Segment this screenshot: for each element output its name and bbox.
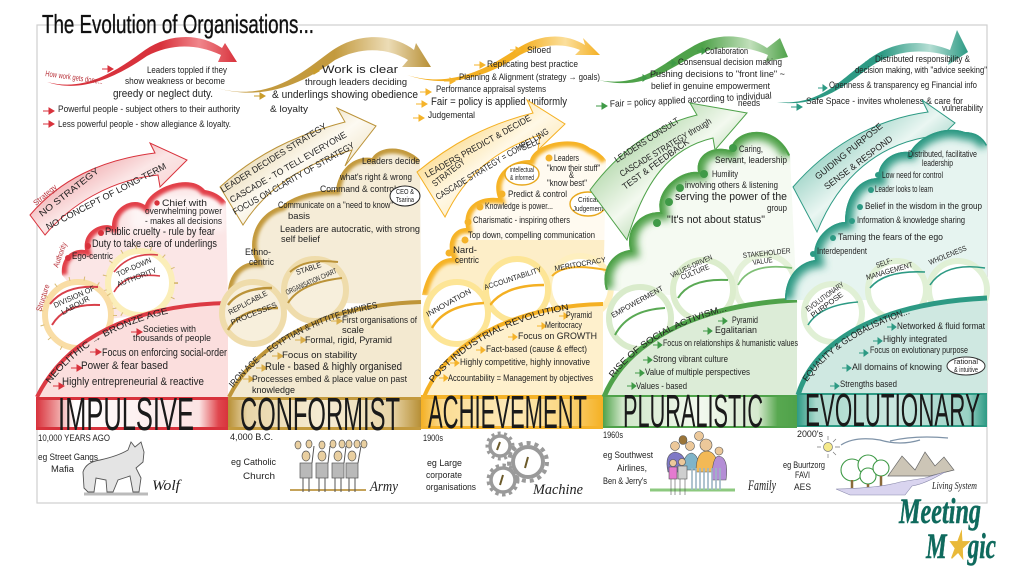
cloud: authority: Caring,: [739, 144, 763, 155]
caption: impulsive: [38, 433, 182, 494]
circle: stable organisation chart: [284, 259, 346, 321]
how work gets done text: Collaboration: [705, 46, 748, 57]
cloud: authority: [51, 175, 230, 320]
arch: era: Societies with: [143, 324, 196, 335]
caption: evolutionary: AES: [794, 482, 811, 493]
cloud: authority: self belief: [281, 234, 320, 245]
cloud: authority: Ego-centric: [72, 251, 113, 262]
arch: era: Processes embed & place value on past: [252, 374, 407, 385]
callout: rational and intuitive: & intuitive: [954, 365, 978, 374]
banner: conformist: CONFORMIST: [240, 388, 400, 440]
banner: conformist: [228, 388, 421, 440]
cloud: authority: "know best": [547, 178, 587, 189]
cloud: authority: [785, 125, 989, 305]
how work gets done text: [596, 46, 785, 110]
caption: pluralistic: 1960s: [603, 430, 623, 441]
how work gets done text: [413, 45, 600, 121]
circle: stable organisation chart: STABLE: [295, 260, 322, 277]
strategy arrow: [793, 100, 955, 232]
banner: impulsive: IMPULSIVE: [58, 388, 194, 440]
caption: conformist: [230, 432, 398, 495]
how work gets done text: show weakness or become: [125, 76, 225, 87]
arch: era: Pyramid: [566, 310, 592, 321]
cloud: authority: Top down, compelling communication: [468, 230, 595, 241]
strategy text: SENSE & RESPOND: [822, 133, 895, 192]
how work gets done text: Consensual decision making: [678, 57, 782, 68]
arch: era: First organisations of: [342, 315, 417, 326]
cloud: authority: Predict & control: [508, 189, 567, 200]
strategy text: NO CONCEPT OF LONG-TERM: [44, 161, 168, 232]
logo: meeting magic: M★gic: [925, 526, 996, 566]
circle: stakeholder value: [735, 246, 795, 315]
arch: era: POST INDUSTRIAL REVOLUTION: [428, 304, 568, 382]
circle: top-down authority: TOP-DOWN: [115, 256, 153, 279]
how work gets done arrow: [407, 37, 600, 81]
strategy arrow: [417, 100, 565, 217]
caption: evolutionary: Living System: [931, 480, 977, 492]
banner: impulsive: [36, 388, 228, 440]
arch: era: [602, 298, 798, 397]
caption: achievement: eg Large: [427, 458, 462, 469]
circle: wholeness: WHOLENESS: [927, 244, 968, 267]
arch: era: Values - based: [636, 381, 687, 392]
banner: pluralistic: [603, 385, 797, 437]
circle: replicable processes: PROCESSES: [229, 300, 278, 327]
strategy text: CASCADE STRATEGY through: [618, 116, 713, 179]
cloud: authority: Leader looks to learn: [875, 184, 933, 195]
cloud: authority: [604, 132, 796, 300]
cloud: authority: leadership: [922, 158, 953, 169]
banner: achievement: ACHIEVEMENT: [428, 386, 587, 438]
icon: army: [290, 440, 367, 492]
cloud: authority: [226, 140, 422, 310]
panel: impulsive: [29, 37, 240, 496]
how work gets done text: [791, 54, 987, 114]
cloud: authority: Tsarina: [396, 195, 415, 204]
caption: achievement: organisations: [426, 482, 476, 493]
logo: meeting magic: Meeting: [898, 491, 981, 531]
circle: innovation: [425, 282, 488, 344]
strategy text: CASCADE - TO TELL EVERYONE: [228, 130, 348, 205]
how work gets done text: belief in genuine empowerment: [651, 81, 770, 92]
caption: pluralistic: Ben & Jerry's: [603, 476, 647, 487]
arch: era: Rule - based & highly organised: [265, 361, 402, 373]
arch: era: RISE OF SOCIAL ACTIVISM...: [608, 307, 726, 378]
circle: empowerment: EMPOWERMENT: [610, 284, 665, 320]
strategy text: "SELL": [517, 135, 544, 154]
cloud: authority: centric: [249, 257, 274, 268]
how work gets done text: needs: [738, 98, 760, 109]
arch: era: [35, 301, 228, 397]
strategy text: LEADERS PREDICT & DECIDE: [423, 113, 533, 180]
arch: era: Strong vibrant culture: [653, 354, 728, 365]
circle: evolutionary purpose: [804, 280, 862, 342]
icon: family: [650, 432, 735, 495]
circle: empowerment: [609, 284, 671, 349]
cloud: authority: CEO &: [396, 187, 414, 196]
arch: era: Value of multiple perspectives: [645, 367, 750, 378]
cloud: authority: involving others & listening: [685, 180, 778, 191]
callout: rational and intuitive: [947, 357, 985, 375]
arch: era: Formal, rigid, Pyramid: [305, 335, 392, 346]
arch: era: Networked & fluid format: [897, 321, 985, 332]
caption: conformist: Church: [243, 471, 275, 482]
circle: values-driven culture: CULTURE: [679, 262, 711, 282]
circle: evolutionary purpose: EVOLUTIONARY: [804, 280, 846, 314]
strategy text: GUIDING PURPOSE: [813, 121, 885, 182]
caption: impulsive: eg Street Gangs: [38, 452, 98, 463]
logo: meeting magic: [898, 491, 996, 566]
strategy text: FOCUS ON CLARITY OF STRATEGY: [231, 140, 356, 217]
how work gets done arrow: [777, 30, 968, 103]
circle: division of labour: Structure: [34, 283, 52, 313]
panel: pluralistic: [590, 36, 798, 495]
caption: conformist: eg Catholic: [231, 457, 276, 468]
arch: era: knowledge: [252, 385, 295, 396]
caption: evolutionary: 2000's: [797, 429, 823, 440]
cloud: authority: overwhelming power: [145, 206, 222, 217]
circle: division of labour: [34, 278, 115, 352]
strategy text: STRATEGY: [430, 157, 467, 189]
cloud: authority: Servant, leadership: [715, 155, 787, 166]
how work gets done text: & underlings showing obedience: [272, 89, 418, 101]
caption: conformist: 4,000 B.C.: [230, 432, 273, 443]
how work gets done text: [43, 65, 240, 130]
arch: era: [422, 302, 604, 395]
callout: critical judgement: Judgement: [573, 204, 604, 213]
how work gets done text: Judgemental: [428, 110, 475, 121]
cloud: authority: Nard-: [453, 245, 477, 256]
strategy text: Strategy: [32, 183, 59, 208]
circle: self-management: [865, 255, 926, 319]
cloud: authority: Distributed, facilitative: [908, 149, 977, 160]
cloud: authority: Charismatic - inspiring others: [473, 215, 570, 226]
cloud: authority: Public cruelty - rule by fear: [105, 226, 215, 238]
callout: critical judgement: Critical: [578, 195, 598, 204]
strategy text: NO STRATEGY: [37, 166, 101, 219]
caption: impulsive: 10,000 YEARS AGO: [38, 433, 110, 444]
strategy text: LEADER DECIDES STRATEGY: [219, 121, 328, 195]
arch: era: Power & fear based: [81, 360, 168, 372]
arch: era: Focus on stability: [282, 350, 357, 361]
cloud: authority: what's right & wrong: [339, 172, 412, 183]
how work gets done arrow: [47, 37, 237, 86]
arch: era: Focus on evolutionary purpose: [870, 345, 968, 356]
circle: top-down authority: AUTHORITY: [115, 265, 158, 289]
icon: living system landscape: [817, 436, 954, 495]
arch: era: Egalitarian: [715, 325, 757, 336]
circle: accountability: [483, 259, 548, 321]
strategy text: TEST & FEEDBACK: [620, 137, 691, 192]
cloud: authority: Ethno-: [245, 247, 271, 258]
cloud: authority: [422, 141, 606, 302]
arch: era: Strengths based: [840, 379, 897, 390]
strategy text: CASCADE STRATEGY = COMPELLING: [434, 126, 550, 202]
circle: top-down authority: [104, 247, 176, 319]
caption: evolutionary: FAVI: [795, 470, 810, 481]
callout: intellectual and informed: & informed: [510, 173, 534, 182]
cloud: authority: Authority: [51, 241, 69, 269]
how work gets done text: Powerful people - subject others to their authority: [58, 104, 240, 115]
caption: impulsive: Wolf: [152, 478, 182, 494]
arch: era: Highly entrepreneurial & reactive: [62, 376, 204, 388]
arch: era: Highly integrated: [883, 334, 947, 345]
arch: era: EQUALITY & GLOBALISATION...: [802, 310, 910, 382]
cloud: authority: Information & knowledge sharing: [857, 215, 965, 226]
panel: evolutionary: [778, 30, 990, 496]
panel: conformist: [218, 37, 431, 495]
cloud: authority: serving the power of the: [675, 191, 787, 203]
how work gets done arrow: [598, 36, 788, 83]
how work gets done text: Less powerful people - show allegiance & loyalty.: [58, 119, 231, 130]
how work gets done text: Siloed: [527, 45, 551, 56]
strategy arrow: [590, 103, 747, 240]
cloud: authority: group: [767, 203, 787, 214]
circle: replicable processes: REPLICABLE: [227, 289, 269, 317]
arch: era: Focus on GROWTH: [518, 331, 597, 342]
cloud: authority: basis: [288, 211, 310, 222]
cloud: authority: centric: [455, 255, 479, 266]
arch: era: Meritocracy: [545, 320, 582, 331]
cloud: authority: Interdependent: [817, 246, 867, 257]
circle: accountability: ACCOUNTABILITY: [483, 265, 543, 292]
circle: meritocracy: [549, 255, 611, 318]
caption: pluralistic: eg Southwest: [603, 450, 653, 461]
cloud: authority: - makes all decisions: [145, 216, 222, 227]
caption: achievement: Machine: [532, 482, 583, 498]
arch: era: Focus on relationships & humanistic values: [663, 338, 798, 349]
callout: rational and intuitive: rational: [954, 357, 978, 366]
caption: evolutionary: [783, 429, 977, 493]
circle: meritocracy: MERITOCRACY: [554, 255, 607, 273]
cloud: authority: Command & control: [320, 184, 396, 195]
how work gets done text: Pushing decisions to "front line" ~: [650, 69, 785, 80]
circle: innovation: INNOVATION: [425, 287, 473, 319]
how work gets done text: & loyalty: [270, 104, 308, 115]
how work gets done text: How work gets done...: [45, 69, 103, 86]
circle: values-driven culture: [669, 253, 733, 320]
circle: wholeness: [927, 244, 987, 319]
how work gets done text: through leaders deciding: [305, 77, 407, 88]
caption: impulsive: Mafia: [51, 464, 75, 475]
title: The Evolution of Organisations...: [42, 9, 314, 39]
banner: pluralistic: PLURALISTIC: [623, 385, 763, 437]
banner: achievement: [421, 386, 603, 438]
cloud: authority: Chief with: [162, 198, 207, 209]
callout: intellectual and informed: [505, 163, 539, 185]
how work gets done text: Distributed responsibility &: [875, 54, 971, 65]
callout: critical judgement: [570, 192, 606, 216]
circle: stable organisation chart: ORGANISATION CHART: [284, 266, 338, 297]
how work gets done text: Fair = policy applied according to individual: [610, 91, 772, 110]
arch: era: Fact-based (cause & effect): [486, 344, 587, 355]
how work gets done text: Performance appraisal systems: [436, 84, 546, 95]
how work gets done text: [254, 64, 418, 115]
arch: era: thousands of people: [133, 333, 211, 344]
strategy text: LEADERS CONSULT: [613, 115, 681, 165]
caption: pluralistic: [603, 430, 776, 494]
how work gets done text: decision making, with "advice seeking": [855, 65, 987, 76]
how work gets done text: Leaders toppled if they: [147, 65, 227, 76]
strategy arrow: [30, 143, 187, 235]
circle: stakeholder value: STAKEHOLDER: [742, 246, 791, 260]
cloud: authority: "know their stuff": [547, 163, 600, 174]
arch: era: All domains of knowing: [852, 362, 942, 373]
arch: era: Highly competitive, highly innovative: [460, 357, 590, 368]
how work gets done text: Work is clear: [322, 64, 398, 76]
cloud: authority: Duty to take care of underlings: [92, 238, 217, 250]
cloud: authority: Taming the fears of the ego: [838, 232, 943, 243]
arch: era: [796, 296, 988, 395]
circle: stakeholder value: VALUE: [752, 255, 773, 267]
caption: pluralistic: Airlines,: [617, 463, 647, 474]
arch: era: scale: [342, 325, 364, 336]
how work gets done text: vulnerability: [942, 103, 983, 114]
caption: pluralistic: Family: [747, 478, 776, 494]
circle: values-driven culture: VALUES-DRIVEN: [669, 253, 714, 280]
cloud: authority: Humility: [712, 169, 738, 180]
icon: wolf: [83, 442, 148, 494]
arch: era: NEOLITHIC → BRONZE AGE: [46, 308, 168, 384]
panel: achievement: [408, 36, 614, 498]
callout: intellectual and informed: intellectual: [510, 165, 534, 174]
circle: self-management: SELF-: [875, 255, 894, 270]
how work gets done arrow: [217, 37, 431, 93]
how work gets done text: greedy or neglect duty.: [113, 88, 213, 100]
cloud: authority: Leaders are autocratic, with strong: [280, 224, 420, 235]
arch: era: Accountability = Management by objectives: [448, 373, 593, 384]
cloud: authority: "It's not about status": [667, 214, 765, 226]
caption: achievement: corporate: [426, 470, 462, 481]
how work gets done text: Safe Space - invites wholeness & care for: [806, 96, 963, 107]
how work gets done text: Planning & Alignment (strategy → goals): [459, 72, 600, 83]
how work gets done text: Replicating best practice: [487, 59, 578, 70]
circle: evolutionary purpose: PURPOSE: [809, 290, 845, 320]
caption: achievement: 1900s: [423, 433, 443, 444]
circle: division of labour: DIVISION OF: [52, 284, 96, 310]
arch: era: Focus on enforcing social-order: [102, 347, 227, 359]
arch: era: IRON AGE → EGYPTIAN & HITTITE EMPIRES: [228, 302, 378, 388]
cloud: authority: &: [569, 170, 575, 181]
caption: evolutionary: eg Buurtzorg: [783, 460, 825, 471]
circle: division of labour: LABOUR: [60, 294, 92, 317]
cloud: authority: Low need for control: [882, 170, 943, 181]
strategy arrow: [220, 108, 376, 225]
circle: self-management: MANAGEMENT: [865, 260, 914, 282]
circle: replicable processes: [222, 282, 284, 344]
cloud: authority: Leaders decide: [362, 156, 420, 167]
how work gets done text: Openness & transparency eg Financial info: [829, 80, 977, 91]
cloud: authority: Communicate on a "need to know": [278, 200, 393, 211]
caption: conformist: Army: [369, 479, 398, 495]
arch: era: Pyramid: [732, 315, 758, 326]
cloud: authority: Leaders: [554, 153, 579, 164]
icon: gears: [487, 433, 547, 495]
how work gets done text: Fair = policy is applied uniformly: [431, 96, 567, 108]
caption: achievement: [423, 433, 583, 498]
cloud: authority: Knowledge is power...: [485, 201, 553, 212]
cloud: authority: Belief in the wisdom in the group: [865, 201, 982, 212]
strategy text: [613, 115, 713, 192]
